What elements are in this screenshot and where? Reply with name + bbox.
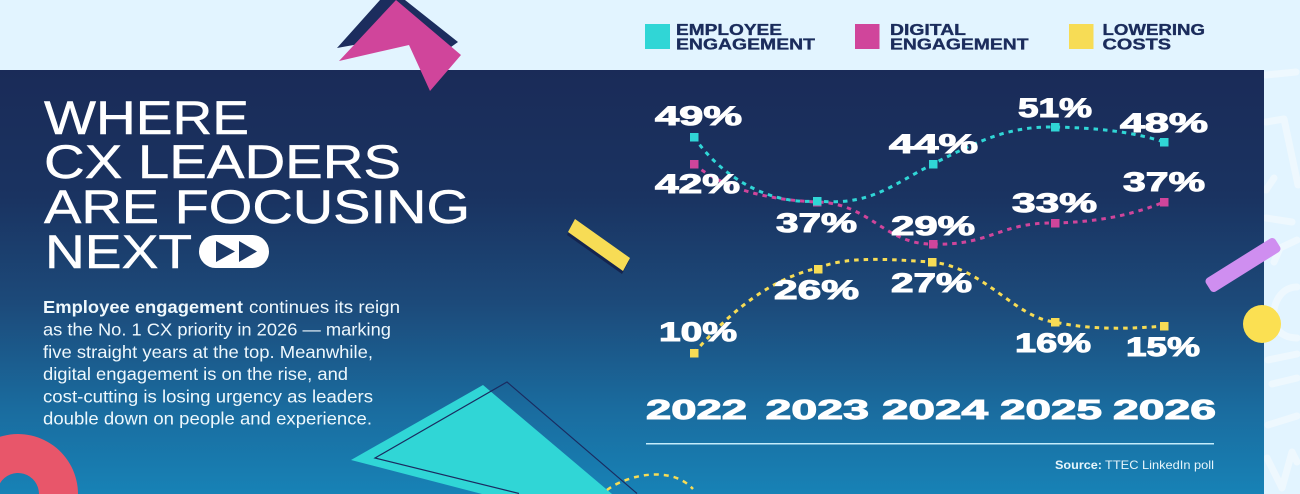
employee engagement values: 44% bbox=[889, 129, 978, 159]
body text: five straight years at the top. Meanwhile, bbox=[43, 342, 373, 362]
lowering costs values: 26% bbox=[774, 275, 859, 305]
employee engagement values: 49% bbox=[655, 101, 742, 131]
series: digital engagement bbox=[690, 160, 1168, 248]
icon: fast-forward pill bbox=[199, 235, 269, 268]
employee engagement values: 48% bbox=[1120, 108, 1208, 138]
lowering costs values: 27% bbox=[891, 268, 972, 298]
legend: employee engagement: EMPLOYEE bbox=[676, 22, 782, 39]
employee engagement values: 51% bbox=[1018, 93, 1092, 123]
title: NEXT bbox=[45, 226, 192, 279]
decorative yellow circle bbox=[1243, 305, 1281, 343]
digital engagement values: 33% bbox=[1012, 188, 1097, 218]
line chart bbox=[646, 93, 1216, 425]
year axis labels: 2025 bbox=[1000, 394, 1102, 425]
digital engagement values: 42% bbox=[655, 169, 740, 199]
legend: employee engagement bbox=[645, 22, 816, 54]
digital engagement values: 37% bbox=[776, 208, 857, 238]
title bbox=[44, 92, 470, 279]
legend: employee engagement: ENGAGEMENT bbox=[676, 36, 816, 54]
series: employee engagement bbox=[690, 123, 1168, 206]
body text bbox=[43, 297, 400, 428]
source note bbox=[1055, 458, 1214, 472]
body text: cost-cutting is losing urgency as leaders bbox=[43, 386, 373, 406]
legend: digital engagement: ENGAGEMENT bbox=[890, 36, 1029, 54]
year axis labels bbox=[646, 394, 1216, 425]
year axis labels: 2026 bbox=[1113, 394, 1216, 425]
body text: Employee engagement bbox=[43, 297, 243, 317]
legend: lowering costs: COSTS bbox=[1102, 36, 1171, 54]
employee engagement values bbox=[655, 93, 1208, 159]
title: ARE FOCUSING bbox=[44, 181, 470, 234]
digital engagement values: 37% bbox=[1123, 167, 1205, 197]
title: WHERE bbox=[44, 92, 249, 145]
lowering costs values bbox=[659, 268, 1200, 362]
legend: lowering costs bbox=[1069, 22, 1205, 54]
lowering costs values: 15% bbox=[1126, 332, 1200, 362]
legend bbox=[645, 22, 1205, 54]
year axis labels: 2023 bbox=[766, 394, 869, 425]
legend: digital engagement: DIGITAL bbox=[890, 22, 966, 39]
series: lowering costs bbox=[690, 258, 1168, 358]
legend: digital engagement bbox=[855, 22, 1029, 54]
source note: Source: bbox=[1055, 458, 1102, 472]
year axis labels: 2022 bbox=[646, 394, 747, 425]
lowering costs values: 16% bbox=[1015, 328, 1091, 358]
body text: continues its reign bbox=[249, 297, 400, 317]
decorative arrow shape: navy and pink bbox=[337, 0, 461, 91]
right-edge doodle pattern bbox=[1266, 72, 1298, 488]
decorative lilac bar bbox=[1204, 236, 1282, 294]
digital engagement values bbox=[655, 167, 1205, 241]
source note: TTEC LinkedIn poll bbox=[1105, 458, 1214, 472]
title: CX LEADERS bbox=[44, 136, 401, 189]
year axis labels: 2024 bbox=[882, 394, 989, 425]
body text: double down on people and experience. bbox=[43, 408, 372, 428]
legend: lowering costs: LOWERING bbox=[1102, 22, 1205, 39]
decorative yellow dashed arc bbox=[607, 474, 693, 490]
decorative teal triangle with outline bbox=[351, 382, 637, 494]
lowering costs values: 10% bbox=[659, 317, 737, 347]
decorative red ring bbox=[0, 434, 78, 494]
body text: as the No. 1 CX priority in 2026 — marking bbox=[43, 320, 391, 340]
body text: digital engagement is on the rise, and bbox=[43, 364, 348, 384]
digital engagement values: 29% bbox=[891, 211, 975, 241]
decorative yellow bar bbox=[567, 219, 630, 274]
